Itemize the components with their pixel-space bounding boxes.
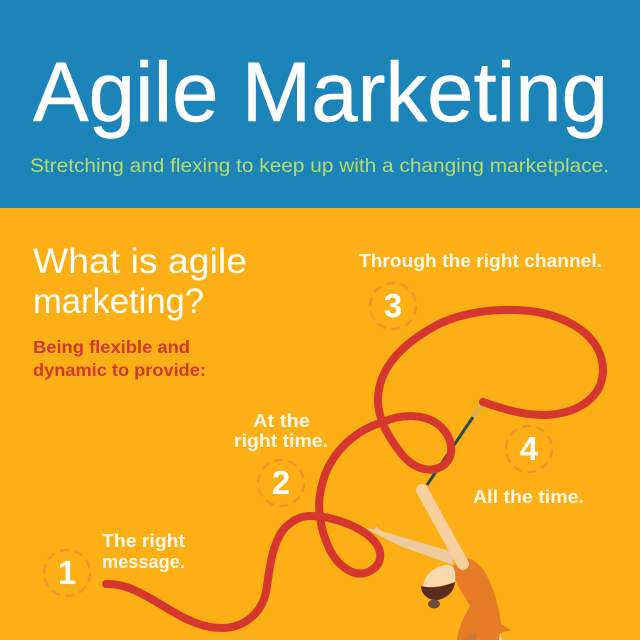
badge 4 [506,426,552,472]
icon: ribbon stick [427,405,482,485]
label 1 second line: message. [102,551,185,572]
badge 1 [44,550,90,596]
number 2: 2 [272,464,290,501]
ribbon [106,310,603,628]
step 2 [253,410,310,506]
gymnast figure [365,490,511,640]
head [423,565,455,587]
dress shadow [464,633,477,640]
label 2: At the [253,410,310,431]
number 1: 1 [58,554,76,591]
label 3: Through the right channel. [359,250,602,271]
heading: what is agile marketing: What is agile [33,242,247,281]
step 1 [44,530,185,596]
raised arm [422,490,463,564]
text: being flexible: Being flexible and [33,337,190,357]
label 2 second line: right time. [234,430,328,451]
panel: orange background [0,208,640,640]
step 4 [473,426,584,507]
number 4: 4 [520,430,539,467]
panel: blue header [0,0,640,208]
hair bun [428,600,440,608]
heading: what is agile marketing: marketing? [33,282,204,321]
heading: what is agile marketing [33,242,247,321]
hair [421,582,455,600]
title: Agile Marketing [33,45,608,139]
subtitle: Stretching and flexing to keep up with a changing marketplace. [30,156,609,177]
label 1: The right [102,530,185,551]
dress [453,558,511,640]
number 3: 3 [384,287,402,324]
label 4: All the time. [473,486,584,507]
text: being flexible: dynamic to provide: [33,360,206,380]
badge 2 [258,460,304,506]
badge 3 [370,283,416,329]
step 3 [359,250,602,329]
legs [468,632,502,640]
lower arm [365,526,453,565]
text: being flexible [33,337,206,380]
